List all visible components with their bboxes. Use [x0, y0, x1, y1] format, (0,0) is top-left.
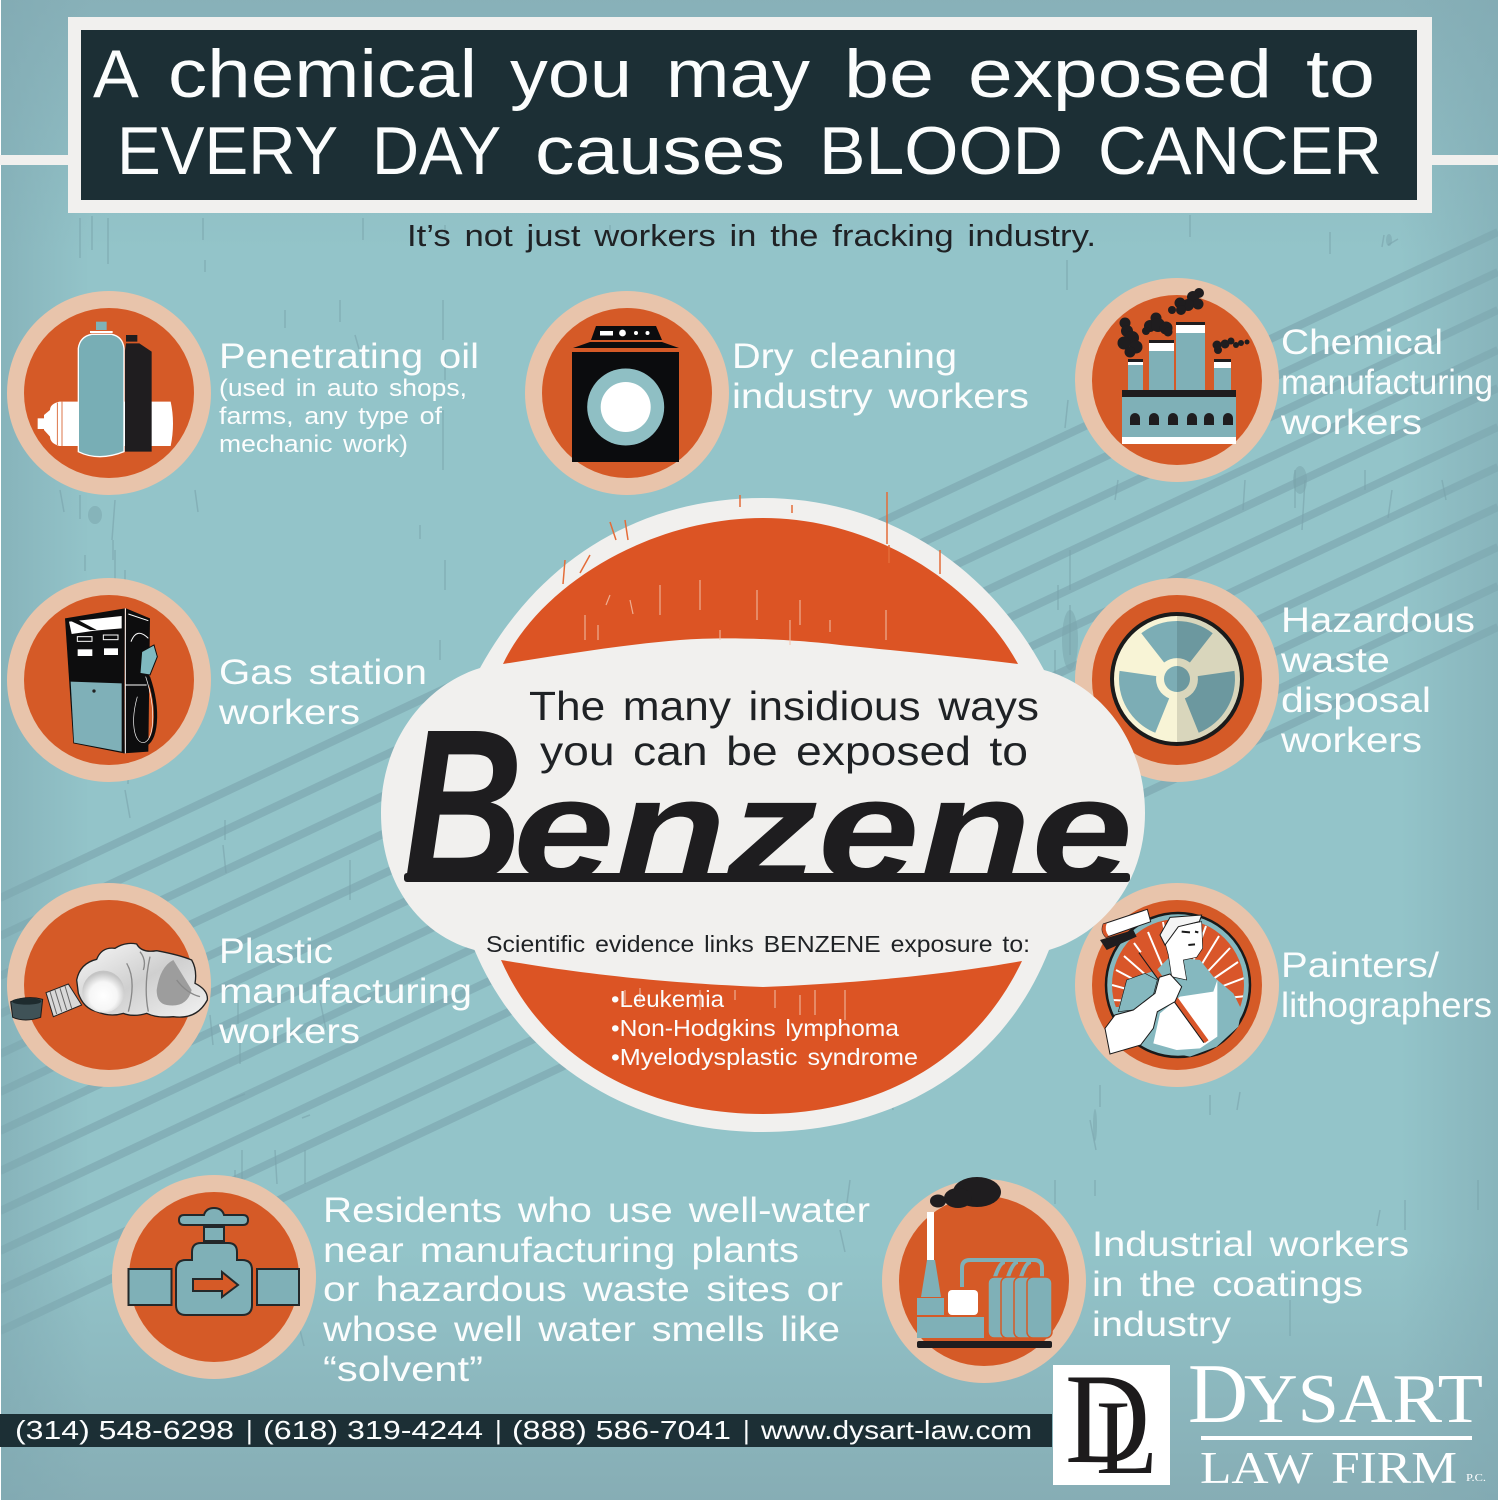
label: well water residents: “solvent” [323, 1350, 483, 1389]
item: gas station [7, 578, 427, 782]
contact bar: www.dysart-law.com [760, 1415, 1032, 1445]
central badge [381, 492, 1145, 1132]
title banner: to [1306, 36, 1375, 112]
icon: painter with roller [1100, 909, 1250, 1057]
item: chemical manufacturing [1075, 278, 1493, 482]
logo wordmark: YSART [1244, 1361, 1483, 1438]
contact bar: | [246, 1415, 253, 1445]
list: linked cancers: •Non-Hodgkins lymphoma [611, 1015, 899, 1041]
logo monogram: D [1065, 1347, 1150, 1490]
title banner [0, 17, 1498, 213]
item: well water residents [112, 1175, 870, 1389]
logo: dysart law firm [1053, 1347, 1486, 1496]
label: plastic manufacturing [218, 932, 472, 1051]
contact bar: (618) 319-4244 [263, 1415, 483, 1445]
title banner: A [93, 36, 139, 112]
label: well water residents: Residents who use well-water [323, 1191, 870, 1230]
list: linked cancers [611, 986, 918, 1070]
logo monogram: L [1096, 1379, 1158, 1496]
label: coatings industry [1092, 1225, 1409, 1344]
label: plastic manufacturing: manufacturing [219, 972, 472, 1011]
label: chemical manufacturing: workers [1280, 403, 1422, 442]
heading: the many insidious ways: The many insidious ways [529, 683, 1039, 729]
label: well water residents: or hazardous waste sites or [323, 1270, 843, 1309]
icon: radiation symbol [1109, 614, 1245, 744]
label: plastic manufacturing: workers [218, 1012, 360, 1051]
label: penetrating oil: mechanic work) [219, 431, 408, 458]
label: plastic manufacturing: Plastic [219, 932, 333, 971]
label: well water residents [322, 1191, 870, 1389]
icon: crushed plastic bottle [11, 943, 207, 1020]
icon: coatings plant [917, 1177, 1052, 1348]
logo wordmark: D [1188, 1347, 1248, 1441]
icon: factory [1118, 288, 1250, 444]
contact bar: | [495, 1415, 502, 1445]
contact bar: (314) 548-6298 [15, 1415, 234, 1445]
title banner: DAY [372, 113, 500, 189]
label: painters: Painters/ [1281, 946, 1439, 985]
label: coatings industry: Industrial workers [1092, 1225, 1409, 1264]
wordmark: benzene: enzene [513, 748, 1133, 911]
title banner: you [510, 36, 632, 112]
label: dry cleaning [732, 337, 1029, 416]
label: hazardous waste: disposal [1281, 681, 1431, 720]
list: linked cancers: •Leukemia [611, 986, 724, 1012]
label: chemical manufacturing: manufacturing [1281, 363, 1493, 402]
label: well water residents: near manufacturing plants [323, 1231, 799, 1270]
item: plastic manufacturing [7, 883, 472, 1087]
text: scientific evidence: Scientific evidence links BENZENE exposure to: [486, 931, 1030, 957]
label: penetrating oil: Penetrating oil [219, 337, 479, 376]
orange top segment [503, 518, 1018, 664]
label: gas station: Gas station [219, 653, 427, 692]
label: well water residents: whose well water smells like [322, 1310, 840, 1349]
label: coatings industry: in the coatings [1092, 1265, 1363, 1304]
title banner: EVERY [117, 113, 337, 189]
badge shape [381, 498, 1145, 1132]
contact bar [0, 1414, 1052, 1447]
title banner: may [666, 36, 810, 112]
label: painters: lithographers [1281, 986, 1492, 1025]
right margin strip [1498, 0, 1507, 1500]
icon: pipe valve [128, 1208, 299, 1315]
label: coatings industry: industry [1092, 1305, 1232, 1344]
label: hazardous waste: Hazardous [1281, 601, 1475, 640]
contact bar: (888) 586-7041 [512, 1415, 731, 1445]
label: hazardous waste: waste [1280, 641, 1390, 680]
logo wordmark: LAW FIRM [1200, 1443, 1457, 1493]
label: penetrating oil: (used in auto shops, [219, 375, 467, 402]
item: dry cleaning [525, 291, 1029, 495]
title banner: BLOOD [819, 113, 1063, 189]
logo wordmark [1188, 1347, 1486, 1493]
title banner: chemical [168, 36, 477, 112]
title banner: be [844, 36, 934, 112]
item: hazardous waste [1075, 578, 1475, 782]
label: painters [1281, 946, 1492, 1025]
item: penetrating oil [7, 291, 479, 495]
icon: gas pump [65, 608, 157, 753]
label: penetrating oil: farms, any type of [219, 403, 442, 430]
title banner: causes [535, 113, 785, 189]
label: gas station [218, 653, 427, 732]
heading: the many insidious ways: you can be exposed to [540, 728, 1028, 774]
label: dry cleaning: Dry cleaning [732, 337, 957, 376]
contact bar: | [743, 1415, 750, 1445]
label: chemical manufacturing: Chemical [1281, 323, 1443, 362]
label: hazardous waste [1280, 601, 1475, 760]
label: gas station: workers [218, 693, 360, 732]
label: hazardous waste: workers [1280, 721, 1422, 760]
label: penetrating oil [219, 337, 479, 458]
wordmark: benzene: B [403, 685, 523, 928]
heading: the many insidious ways [529, 683, 1039, 774]
title banner: CANCER [1098, 113, 1382, 189]
label: chemical manufacturing [1280, 323, 1493, 442]
title banner: exposed [968, 36, 1272, 112]
item: painters [1075, 883, 1492, 1087]
label: dry cleaning: industry workers [732, 377, 1029, 416]
icon: spray cans [38, 322, 173, 457]
item: coatings industry [882, 1177, 1409, 1383]
icon: washing machine [572, 326, 679, 462]
subtitle: It’s not just workers in the fracking industry. [407, 218, 1096, 253]
wordmark: benzene [403, 685, 1133, 928]
list: linked cancers: •Myelodysplastic syndrome [611, 1044, 918, 1070]
orange bottom segment [501, 960, 1022, 1114]
logo wordmark: P.C. [1466, 1473, 1486, 1484]
